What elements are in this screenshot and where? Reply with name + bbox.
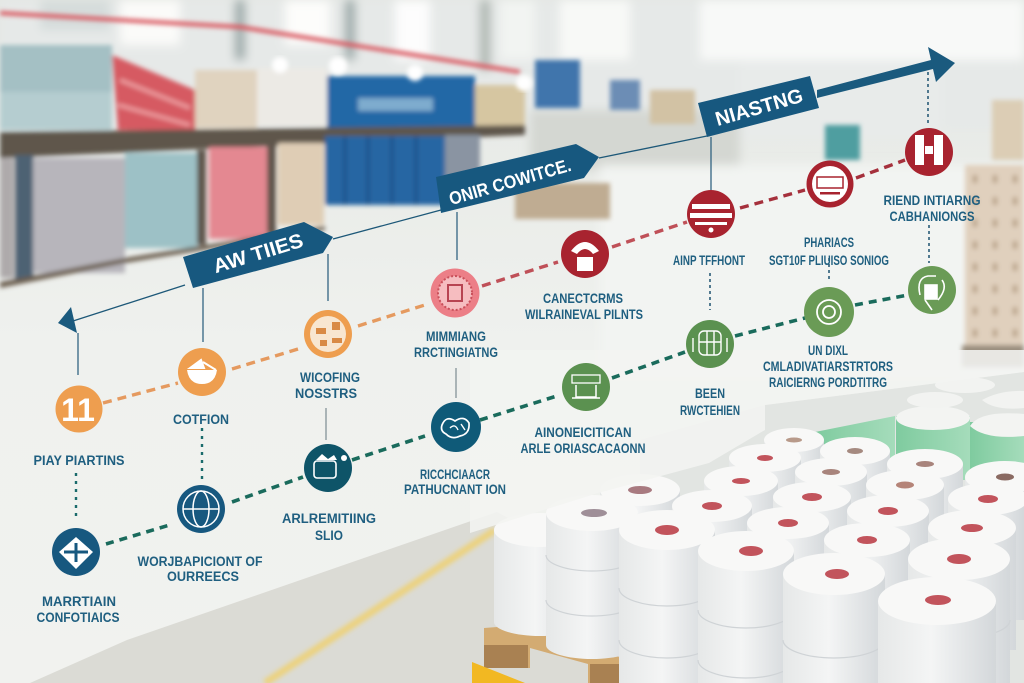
vertical connectors <box>76 72 929 520</box>
dashed path: orange to red <box>103 160 905 403</box>
banner: AW TIIES <box>183 222 333 288</box>
icon: red stack <box>687 190 735 238</box>
text labels: right half: RWCTEHIEN <box>680 403 740 418</box>
icon: orange step 11 <box>56 386 102 432</box>
icon: orange step 11: 11 <box>61 392 95 428</box>
text labels: right half: AINONEICITICAN <box>534 425 632 440</box>
roll stickers <box>581 438 1014 605</box>
text labels: left half: PATHUCNANT ION <box>404 482 506 497</box>
text labels: right half: SGT10F PLIUISO SONIOG <box>769 253 889 268</box>
banner: NIASTNG <box>698 76 819 137</box>
roll bodies and tops, back to front <box>494 428 1024 683</box>
text labels: right half: CABHANIONGS <box>890 209 974 224</box>
icon: red badge <box>806 160 854 208</box>
banner: NIASTNG: NIASTNG <box>713 85 806 131</box>
arrow head: left start <box>58 307 77 333</box>
text labels: left half: SLIO <box>315 528 343 543</box>
text labels: right half: BEEN <box>695 386 725 401</box>
main timeline arrow line <box>73 136 707 321</box>
text labels: left half: NOSSTRS <box>295 386 357 401</box>
text labels: right half: CANECTCRMS <box>543 291 623 306</box>
icon: green bottle and leaf <box>908 266 956 314</box>
floor corner with yellow line <box>30 512 660 683</box>
icon: teal container <box>304 444 352 492</box>
text labels: right half: AINP TFFHONT <box>673 253 746 268</box>
icon: orange bowl <box>178 348 226 396</box>
text labels: left half: RICCHCIAACR <box>420 467 490 482</box>
text labels: left half: ARLREMITIING <box>282 511 376 526</box>
text labels: right half: CMLADIVATIARSTRTORS <box>763 359 893 374</box>
text labels: right half: RIEND INTIARNG <box>884 193 980 208</box>
text labels: right half <box>520 193 980 456</box>
text labels: left half: CONFOTIAICS <box>36 610 120 625</box>
icon: green machine <box>562 363 610 411</box>
icon: pink seal <box>430 268 480 318</box>
text labels: right half: UN DIXL <box>808 343 848 358</box>
text labels: left half: WORJBAPICIONT OF <box>138 554 262 569</box>
text labels: left half: WICOFING <box>300 370 360 385</box>
icon: green backpack <box>686 320 734 368</box>
text labels: left half: MIMMIANG <box>426 329 486 344</box>
icon: teal balance diamond <box>52 528 100 576</box>
text labels: right half: PHARIACS <box>804 235 854 250</box>
icon: green rings <box>804 287 854 337</box>
text labels: left half: PIAY PIARTINS <box>34 453 124 468</box>
pallet <box>472 625 640 683</box>
text labels: left half: MARRTIAIN <box>42 594 116 609</box>
text labels: left half: COTFION <box>173 412 229 427</box>
icon: teal cotton <box>431 402 481 452</box>
icon: red cylinders <box>905 128 953 176</box>
dashed path: green <box>106 295 908 544</box>
text labels: right half: WILRAINEVAL PILNTS <box>525 307 643 322</box>
green rolls row <box>815 377 1024 482</box>
arrow head: top right <box>817 47 955 98</box>
banner: ONIR COWITCE: ONIR COWITCE. <box>447 155 573 209</box>
banner: AW TIIES: AW TIIES <box>211 230 306 278</box>
text labels: right half: ARLE ORIASCACAONN <box>520 441 646 456</box>
text labels: right half: RAICIERNG PORDTITRG <box>769 375 887 390</box>
icon: red lock <box>561 230 609 278</box>
overlay fade over rear rolls <box>470 350 1024 533</box>
icon: teal globe <box>177 485 225 533</box>
text labels: left half: RRCTINGIATNG <box>414 345 498 360</box>
photo: stacked white rolls on pallet <box>472 372 1024 683</box>
text labels: left half <box>34 329 506 625</box>
text labels: left half: OURREECS <box>167 569 239 584</box>
icon: orange patterned disc <box>304 310 352 358</box>
